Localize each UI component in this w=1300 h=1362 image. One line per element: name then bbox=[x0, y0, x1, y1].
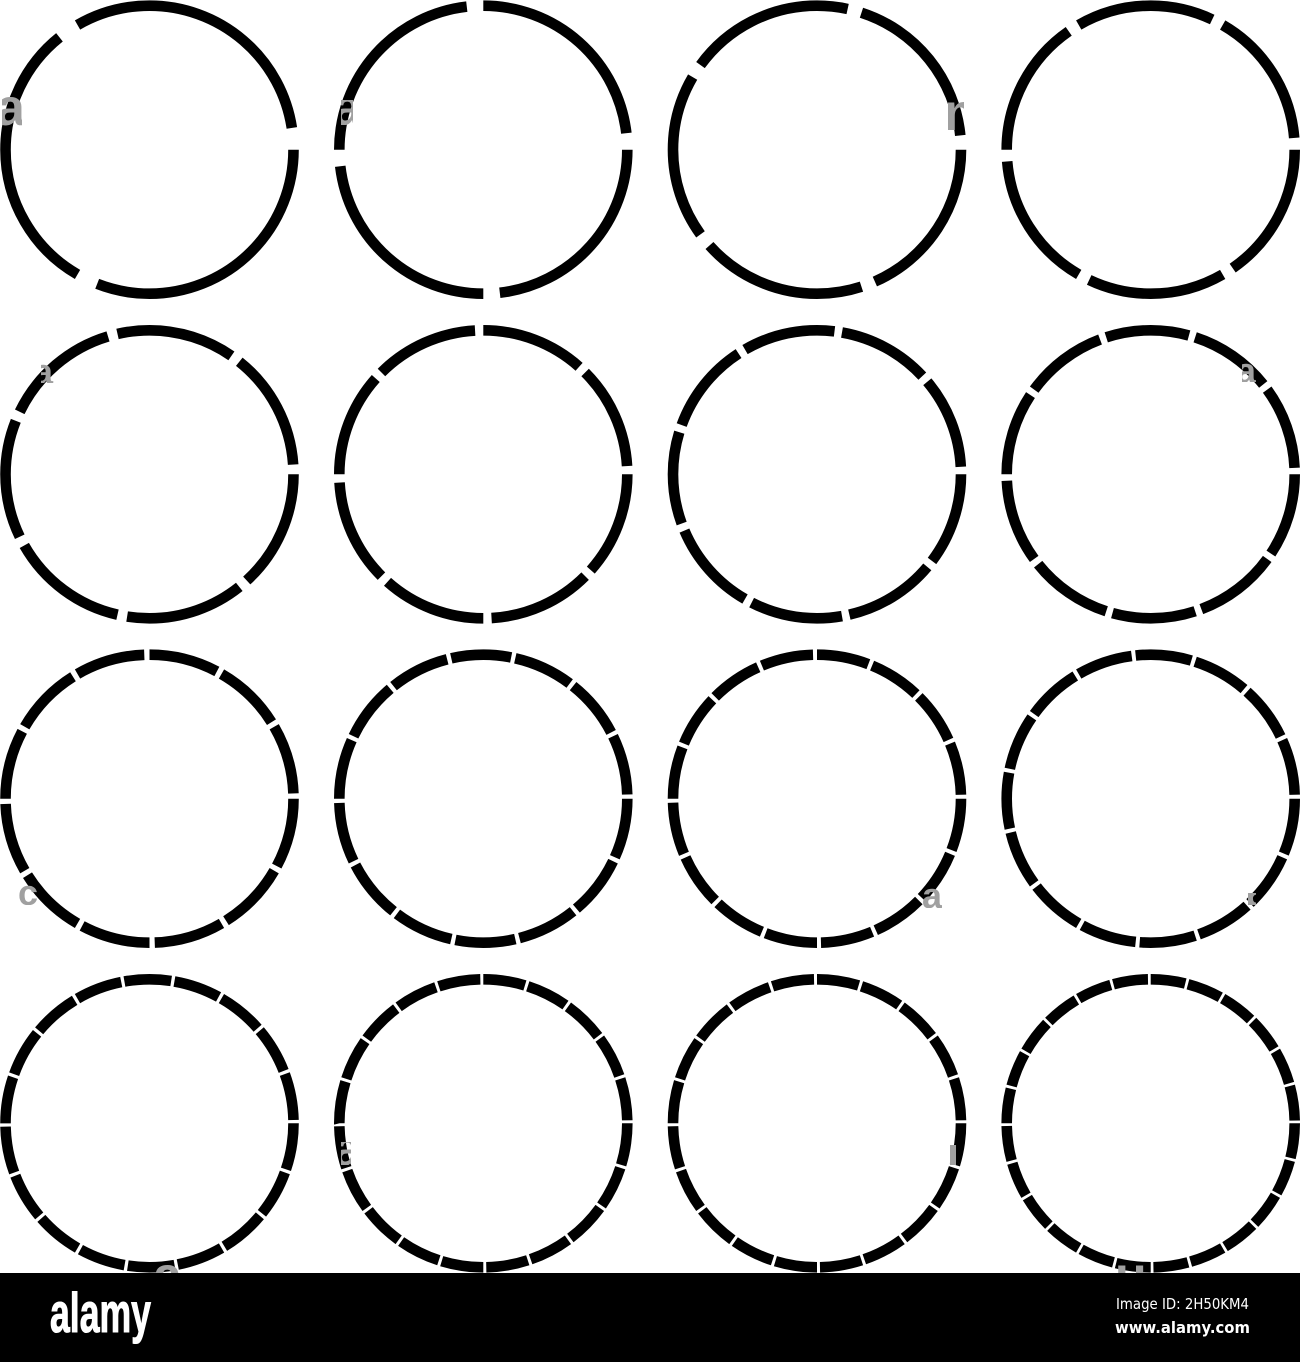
row 2 of segmented rings bbox=[6, 330, 1295, 618]
ring: 3 segments bbox=[6, 6, 294, 294]
ring: 20 segments bbox=[339, 979, 627, 1267]
ring: 8 segments bbox=[339, 330, 627, 618]
watermark fragments: a bbox=[153, 1247, 183, 1305]
watermark fragments: a bbox=[333, 1120, 363, 1178]
row 1 of segmented rings bbox=[6, 6, 1295, 294]
row 3 of segmented rings bbox=[6, 655, 1295, 943]
ring: 10 segments bbox=[1007, 330, 1295, 618]
alamy logo wordmark: alamy bbox=[50, 1281, 151, 1344]
watermark fragments: a bbox=[1244, 861, 1274, 919]
footer bar bbox=[0, 1273, 1300, 1362]
watermark fragments: a bbox=[333, 79, 363, 137]
ring: 14 segments bbox=[339, 655, 627, 943]
ring: 9 segments bbox=[673, 330, 961, 618]
watermark fragments: n bbox=[946, 1121, 978, 1179]
ring: 7 segments bbox=[6, 330, 294, 618]
ring: 16 segments bbox=[673, 655, 961, 943]
ring: 20 segments, third column bbox=[673, 979, 961, 1267]
ring: 15 segments bbox=[1007, 655, 1295, 943]
footer background bbox=[0, 1273, 1300, 1362]
ring: 6 segments bbox=[1007, 6, 1295, 294]
ring: 18 segments bbox=[6, 979, 294, 1267]
image id: Image ID: 2H50KM4 bbox=[1116, 1295, 1249, 1313]
ring: 12 segments bbox=[6, 655, 294, 943]
watermark fragments: c bbox=[18, 872, 38, 913]
website: www.alamy.com bbox=[1115, 1318, 1250, 1337]
ring: 5 segments bbox=[673, 6, 961, 294]
row 4 of segmented rings bbox=[6, 979, 1295, 1267]
ring: 4 segments bbox=[339, 6, 627, 294]
watermark fragments: a bbox=[33, 351, 54, 392]
watermark fragments: n bbox=[944, 84, 976, 142]
watermark fragments: u bbox=[1115, 1247, 1147, 1305]
ring: 24 segments bbox=[1007, 979, 1295, 1267]
watermark fragments: a bbox=[1236, 350, 1257, 391]
watermark fragments: a bbox=[922, 875, 943, 916]
